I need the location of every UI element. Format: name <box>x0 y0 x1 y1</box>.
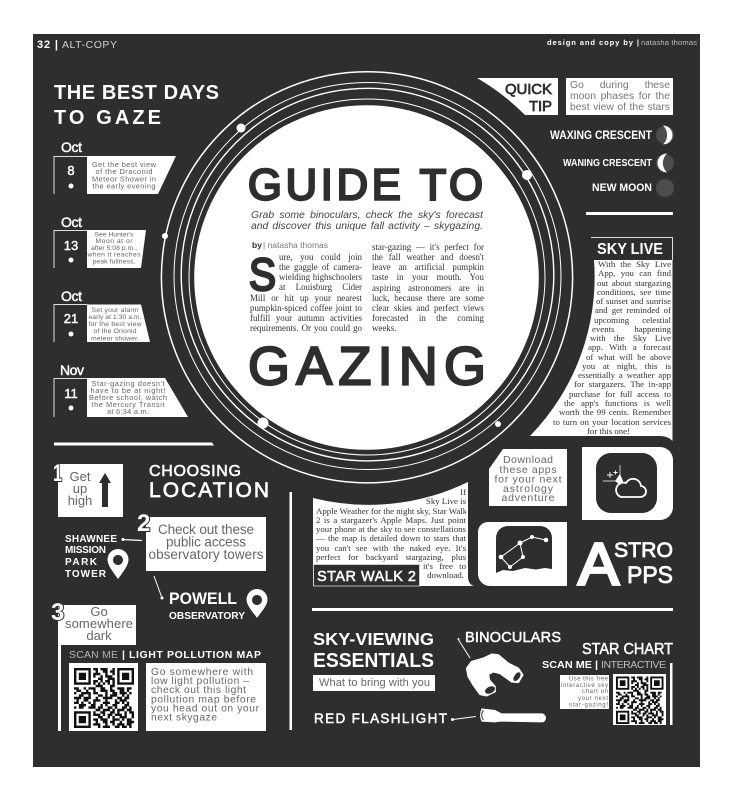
heading: the best days to gaze: TO GAZE <box>54 107 161 129</box>
icon: flashlight <box>480 708 546 722</box>
star chart text box: chart on <box>582 689 608 695</box>
article column 2: the fall weather and doesn't <box>372 252 484 262</box>
heading: sky-viewing essentials <box>313 629 435 691</box>
qr code: star chart <box>613 674 666 725</box>
star walk 2 label <box>314 564 420 586</box>
step 3: go somewhere dark: Go <box>90 604 108 619</box>
light pollution text box: you head out on your <box>151 704 260 714</box>
date card: Oct 13 <box>54 214 146 268</box>
heading: sky-viewing essentials: SKY-VIEWING <box>313 629 434 649</box>
icon: binoculars <box>467 654 523 696</box>
download apps callout: for your next <box>494 474 562 486</box>
article column 2: luck, because there are some <box>372 293 484 303</box>
heading: choosing location: LOCATION <box>149 479 269 502</box>
light pollution text box: check out this light <box>151 685 246 696</box>
date card: Oct 21 <box>54 288 150 342</box>
header: page number: ALT-COPY <box>62 39 117 51</box>
sky live text panel: App, you can find <box>598 268 671 278</box>
icon: map pin <box>246 589 268 618</box>
star walk 2 text panel: you can't see with the naked eye. It's <box>316 543 466 553</box>
quick tip text: moon phases for the <box>570 91 670 102</box>
article column 2: star-gazing — it's perfect for <box>372 242 484 252</box>
sky live text panel <box>530 260 672 441</box>
article column 2: clear skies and perfect views <box>372 303 484 313</box>
light pollution text box: next skygaze <box>151 712 217 724</box>
download apps callout: these apps <box>500 464 556 476</box>
powell observatory <box>154 576 268 622</box>
step 2: observatory towers: 2 <box>137 510 150 537</box>
light pollution text box: low light pollution – <box>151 676 249 687</box>
sky live text panel: out about stargazing <box>597 278 671 288</box>
star walk 2 text panel: Sky Live is <box>426 496 466 506</box>
date card: Oct 13: when it reaches <box>86 252 141 258</box>
quick tip wedge: QUICK <box>505 81 552 98</box>
article column 1 <box>250 252 362 336</box>
moon: new moon <box>592 179 674 197</box>
article column 2: forecasted in the coming <box>372 313 484 323</box>
icon: map pin <box>108 549 128 579</box>
date card: Oct 21: Oct <box>61 288 82 304</box>
sky live text panel: events happening <box>592 324 671 334</box>
heading: star chart: SCAN ME | <box>542 659 598 671</box>
sky live text panel: and get reminded of <box>595 305 671 315</box>
title: guide to: GUIDE TO <box>248 162 483 210</box>
heading: star chart <box>542 641 673 671</box>
orbit rings <box>161 72 573 483</box>
step 2: observatory towers: Check out these <box>158 522 254 537</box>
article column 1: requirements. Or you could go <box>250 323 362 333</box>
date card: Nov 11: 11 <box>64 386 78 401</box>
article column 1: ure, you could join <box>279 252 362 262</box>
article byline: by <box>252 240 262 250</box>
date card: Oct 8: of the Draconid <box>96 167 152 176</box>
header: byline: design and copy by | <box>547 38 639 47</box>
title: gazing: GAZING <box>248 336 486 396</box>
date card: Nov 11: the Mercury Transit <box>92 400 164 409</box>
shawnee mission park tower: PARK <box>65 557 98 568</box>
step 1: get up high: 1 <box>53 460 62 487</box>
star walk 2 text panel: perfect for backyard stargazing, plus <box>316 552 466 562</box>
step 3: go somewhere dark: dark <box>86 628 112 643</box>
scan me: light pollution map: SCAN ME <box>69 649 118 661</box>
article column 2: weeks. <box>372 323 396 333</box>
heading: sky-viewing essentials: ESSENTIALS <box>313 649 434 672</box>
header: byline: natasha thomas <box>641 38 697 47</box>
sky live text panel: upcoming celestial <box>594 315 671 325</box>
article column 2: aspiring astronomers are in <box>372 283 484 293</box>
sky live text panel: you at night, this is <box>582 361 671 371</box>
heading: astro apps: A <box>578 532 620 598</box>
date card: Nov 11: Before school, watch <box>89 393 167 402</box>
article column 2 <box>372 242 484 336</box>
heading: choosing location <box>149 463 269 502</box>
powell observatory: POWELL <box>169 589 237 608</box>
subtitle <box>251 210 483 234</box>
date card: Oct 13: Oct <box>61 214 82 230</box>
quick tip text: Go during these <box>570 80 670 91</box>
sky live text panel: for stargazers. The in-app <box>574 379 671 389</box>
date card: Nov 11: Nov <box>60 362 84 378</box>
star walk 2 text panel: download. <box>427 570 464 580</box>
star walk 2 text panel: 2 is a stargazer's Apple Maps. Just point <box>316 515 466 525</box>
header: page number <box>37 39 117 51</box>
heading: the best days to gaze: THE BEST DAYS <box>54 82 219 104</box>
scan me: light pollution map: | LIGHT POLLUTION MAP <box>122 649 261 661</box>
article column 1: pumpkin-spiced coffee joint to <box>250 303 362 313</box>
shawnee mission park tower: MISSION <box>65 545 106 556</box>
qr code: light pollution map <box>69 663 138 731</box>
header: page number: 32 | <box>37 39 58 51</box>
star walk 2 text panel: it's free to <box>423 561 466 571</box>
sky live text panel: app. With a forecast <box>588 342 671 352</box>
central white disc <box>194 105 539 450</box>
date card: Oct 8: the early evening <box>92 182 156 190</box>
subtitle: Grab some binoculars, check the sky's forecast <box>251 210 483 221</box>
quick tip wedge <box>477 78 558 115</box>
heading: astro apps: PPS <box>627 562 673 589</box>
star walk 2 text panel: your phone at the sky to see constellations <box>316 524 466 534</box>
icon: up arrow <box>99 473 111 507</box>
star walk 2 text panel: — the map is detailed down to stars that <box>316 533 466 543</box>
moon: waning crescent <box>563 154 674 172</box>
quick tip text: best view of the stars <box>570 102 670 113</box>
step 1: get up high: high <box>68 493 92 508</box>
step 2: observatory towers: public access <box>166 534 246 550</box>
moon: new moon: NEW MOON <box>592 182 652 194</box>
icon: sky live app <box>582 447 673 520</box>
date card: Oct 13: See Hunter's <box>94 232 134 238</box>
date card: Oct 8: 8 <box>67 163 75 178</box>
binoculars <box>458 630 561 696</box>
heading: astro apps <box>578 532 673 598</box>
star chart text box <box>560 675 609 709</box>
date card: Oct 8: Meteor Shower in <box>92 174 156 184</box>
article column 1: at Louisburg Cider <box>279 282 362 292</box>
sky live text panel: worth the 99 cents. Remember <box>559 407 671 417</box>
sky live text panel: for this one! <box>587 426 630 436</box>
moon: waning crescent: WANING CRESCENT <box>563 157 652 169</box>
article column 2: taste in your mouth. You <box>372 272 484 282</box>
article column 1: Mill or hit up your nearest <box>250 293 362 303</box>
step 2: observatory towers: observatory towers <box>148 547 264 562</box>
shawnee mission park tower: TOWER <box>65 569 107 580</box>
light pollution text box <box>146 663 266 731</box>
sky live text panel: purchase for full access to <box>569 389 671 399</box>
drop cap S: S <box>249 249 276 300</box>
star chart text box: star-gazing! <box>569 702 608 708</box>
header: byline <box>547 38 697 47</box>
date card: Oct 8: Get the best view <box>92 160 157 169</box>
date card: Oct 13: peak fullness. <box>92 258 136 266</box>
sky live text panel: of sunset and sunrise <box>596 296 671 306</box>
step 2: observatory towers <box>137 510 266 571</box>
sky live heading <box>591 238 672 260</box>
article column 1: wielding highschoolers <box>279 272 362 282</box>
star chart text box: interactive sky <box>561 683 608 689</box>
date card: Oct 21: Set your alarm <box>92 307 139 314</box>
moon: waxing crescent <box>550 126 674 144</box>
step 3: go somewhere dark: 3 <box>51 599 64 626</box>
article column 1: the gaggle of camera- <box>279 262 362 272</box>
date card: Oct 8 <box>54 139 176 194</box>
date card: Nov 11: Star-gazing doesn't <box>92 379 164 388</box>
heading: star chart: STAR CHART <box>582 641 673 658</box>
date card: Oct 21: for the best view <box>88 321 142 328</box>
quick tip text <box>566 78 673 115</box>
date card: Oct 8: Oct <box>61 139 82 155</box>
date card: Oct 21: meteor shower. <box>91 336 139 342</box>
sky live text panel: to turn on your location services <box>553 417 671 427</box>
star chart text box: your next <box>578 696 608 702</box>
icon: star walk app <box>478 522 567 586</box>
article column 1: fulfill your autumn activities <box>250 313 362 323</box>
date card: Oct 13: after 5:08 p.m., <box>91 245 137 252</box>
heading: sky-viewing essentials: What to bring with you <box>319 677 430 689</box>
star walk 2 text panel <box>313 482 474 586</box>
heading: star chart: INTERACTIVE <box>601 659 666 671</box>
sky live text panel: essentially a weather app <box>578 370 671 380</box>
shawnee mission park tower <box>65 534 142 580</box>
shawnee mission park tower: SHAWNEE <box>65 534 117 545</box>
star chart text box: Use this free <box>569 676 609 682</box>
step 1: get up high: up <box>73 481 87 496</box>
date card: Nov 11: have to be at night! <box>90 386 166 395</box>
date card: Oct 21: of the Orionid <box>94 328 137 335</box>
star walk 2 text panel: Apple Weather for the night sky, Star Walk <box>316 506 466 516</box>
red flashlight: RED FLASHLIGHT <box>314 711 447 726</box>
sky live text panel: conditions, see time <box>597 287 671 297</box>
heading: astro apps: STRO <box>614 539 673 562</box>
heading: choosing location: CHOOSING <box>149 463 241 480</box>
date card: Oct 13: 13 <box>64 238 78 253</box>
heading: the best days to gaze <box>54 82 219 129</box>
download apps callout: astrology <box>503 483 554 495</box>
step 3: go somewhere dark: somewhere <box>65 616 133 631</box>
date card: Nov 11 <box>54 362 188 417</box>
binoculars: BINOCULARS <box>465 630 561 646</box>
download apps callout: Download <box>503 454 553 466</box>
article byline: | natasha thomas <box>263 240 328 250</box>
quick tip wedge: TIP <box>529 98 552 115</box>
sky live text panel: with the Sky Live <box>590 333 671 343</box>
date card: Oct 21: early at 1:30 a.m. <box>88 314 142 321</box>
article column 2: leave an artificial pumpkin <box>372 262 484 272</box>
moon: waxing crescent: WAXING CRESCENT <box>550 130 652 142</box>
subtitle: and discover this unique fall activity – skygazing. <box>251 221 483 232</box>
star walk 2 label: STAR WALK 2 <box>317 569 416 585</box>
step 1: get up high <box>53 460 123 517</box>
step 1: get up high: Get <box>70 469 91 484</box>
light pollution text box: pollution map before <box>151 694 256 706</box>
sky live text panel: of what will be above <box>586 352 671 362</box>
powell observatory: OBSERVATORY <box>169 610 245 622</box>
download apps callout: adventure <box>502 492 555 504</box>
step 3: go somewhere dark <box>51 599 136 731</box>
date card: Nov 11: at 6:34 a.m. <box>107 407 149 416</box>
date card: Oct 13: Moon at or <box>96 238 133 245</box>
sky live heading: SKY LIVE <box>597 241 663 258</box>
sky live text panel: the app's functions is well <box>564 398 671 408</box>
light pollution text box: Go somewhere with <box>151 667 253 678</box>
download apps callout <box>489 449 567 506</box>
date card: Oct 21: 21 <box>64 311 78 326</box>
red flashlight <box>314 708 546 726</box>
